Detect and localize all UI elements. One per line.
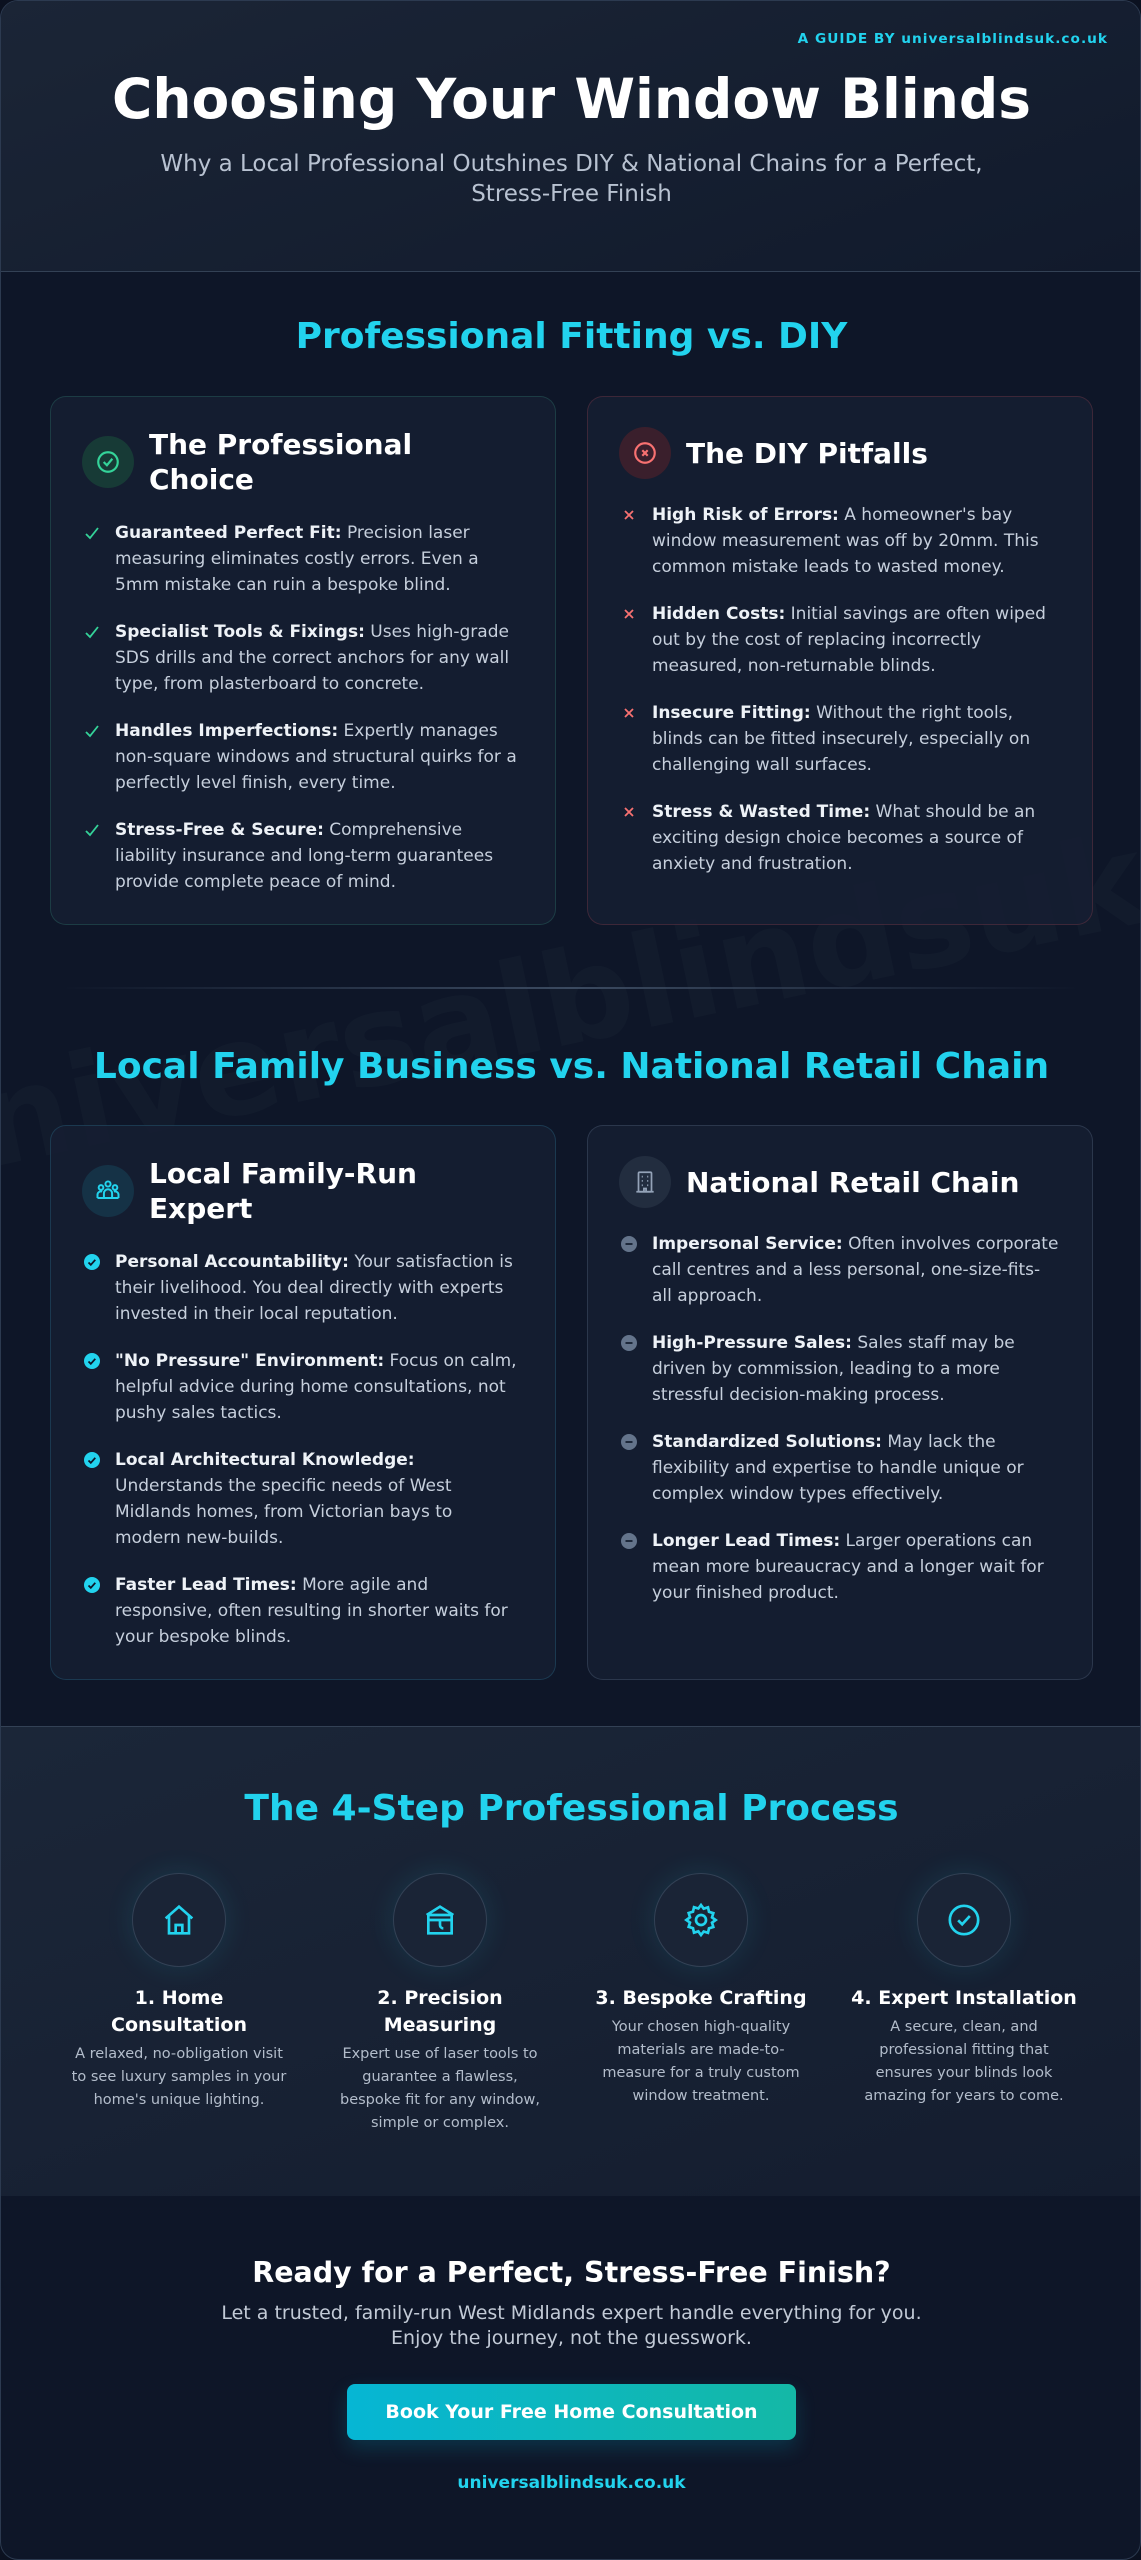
panel: national retail chain: [587, 1125, 1093, 1680]
panel: local family-run: [50, 1125, 556, 1680]
item: Stress-Free & Secure: Comprehensive liability insurance and long-term guarantees provide complete peace of mind.: [115, 820, 493, 892]
panel: process section: [1, 1726, 1141, 2196]
title: Choosing Your Window Blinds: [112, 67, 1031, 131]
item: Stress & Wasted Time: What should be an exciting design choice becomes a source of anxiety and frustration.: [652, 802, 1035, 874]
heading: DIY: The DIY Pitfalls: [686, 436, 928, 470]
item: "No Pressure" Environment: Focus on calm, helpful advice during home consultations, not pushy sales tactics.: [115, 1351, 517, 1423]
footer link: universalblindsuk.co.uk: [457, 2473, 686, 2493]
panel: DIY pitfalls: [587, 396, 1093, 925]
CTA heading: Ready for a Perfect, Stress-Free Finish?: [252, 2256, 891, 2289]
CTA text: Let a trusted, family-run West Midlands expert handle everything for you.: [221, 2302, 922, 2324]
CTA button: [347, 2384, 796, 2440]
item: Hidden Costs: Initial savings are often wiped out by the cost of replacing incorrectly measured, non-returnable blinds.: [652, 604, 1046, 676]
item: Handles Imperfections: Expertly manages non-square windows and structural quirks for a perfectly level finish, every time.: [115, 721, 517, 793]
step 2: 2. Precision Measuring: [377, 1987, 503, 2036]
item: Guaranteed Perfect Fit: Precision laser measuring eliminates costly errors. Even a 5mm mistake can ruin a bespoke blind.: [115, 523, 479, 595]
icon: gear: [654, 1873, 748, 1967]
item: call centres and a less personal, one-size-fits-: [652, 1260, 1040, 1280]
item: [621, 1234, 1058, 1306]
item: High Risk of Errors: A homeowner's bay window measurement was off by 20mm. This common mistake leads to wasted money.: [652, 505, 1039, 577]
step 1: A relaxed, no-obligation visit to see luxury samples in your home's unique lighting.: [72, 2046, 286, 2108]
icon: check circle: [917, 1873, 1011, 1967]
step 3: [595, 1872, 807, 2104]
item: modern new-builds.: [115, 1528, 283, 1548]
step 1: 1. Home Consultation: [111, 1987, 247, 2036]
step 4: A secure, clean, and professional fitting that ensures your blinds look amazing for years to come.: [864, 2019, 1064, 2104]
item: Specialist Tools & Fixings: Uses high-grade SDS drills and the correct anchors for any wall type, from plasterboard to concrete.: [115, 622, 509, 694]
heading: local: Local Family-Run Expert: [149, 1157, 417, 1225]
step 2: [340, 1872, 540, 2131]
step 3: Your chosen high-quality materials are made-to-: [612, 2019, 790, 2058]
item: Standardized Solutions: May lack the flexibility and expertise to handle unique or complex window types effectively.: [652, 1432, 1024, 1504]
item: [84, 1450, 452, 1548]
icon: house: [132, 1873, 226, 1967]
panel: professional choice: [50, 396, 556, 925]
heading: national: National Retail Chain: [686, 1166, 1019, 1198]
step 3: 3. Bespoke Crafting: [595, 1987, 807, 2009]
icon: measuring: [393, 1873, 487, 1967]
item: High-Pressure Sales: Sales staff may be driven by commission, leading to a more stressful decision-making process.: [652, 1333, 1015, 1405]
step 1: [72, 1872, 286, 2108]
guide label: A GUIDE BY universalblindsuk.co.uk: [798, 31, 1108, 47]
item: Longer Lead Times: Larger operations can mean more bureaucracy and a longer wait for your finished product.: [652, 1531, 1044, 1603]
heading: professional: The Professional Choice: [149, 428, 412, 496]
section title: local vs national: Local Family Business vs. National Retail Chain: [94, 1046, 1049, 1087]
item: Impersonal Service: Often involves corporate: [652, 1234, 1058, 1254]
CTA text: Enjoy the journey, not the guesswork.: [391, 2327, 752, 2349]
step 4: [851, 1872, 1077, 2104]
header background: [1, 1, 1141, 272]
step 2: bespoke fit for any window,: [340, 2092, 540, 2108]
step 2: guarantee a flawless,: [362, 2069, 518, 2085]
CTA button: Book Your Free Home Consultation: [385, 2401, 758, 2423]
heading: national: [619, 1156, 1019, 1208]
step 4: 4. Expert Installation: [851, 1987, 1077, 2009]
heading: DIY: [619, 427, 928, 479]
subtitle: Why a Local Professional Outshines DIY & National Chains for a Perfect, Stress-Free Finish: [160, 151, 983, 207]
step 2: simple or complex.: [371, 2115, 509, 2131]
CTA text: [221, 2302, 922, 2349]
process title: The 4-Step Professional Process: [244, 1788, 899, 1829]
item: Understands the specific needs of West: [115, 1476, 452, 1496]
step 3: measure for a truly custom window treatment.: [602, 2065, 800, 2104]
item: Personal Accountability: Your satisfaction is their livelihood. You deal directly with experts invested in their local reputation.: [115, 1252, 513, 1324]
step 2: Expert use of laser tools to: [342, 2046, 538, 2062]
section title: professional vs DIY: Professional Fitting vs. DIY: [296, 316, 847, 357]
item: Midlands homes, from Victorian bays to: [115, 1502, 452, 1522]
item: Insecure Fitting: Without the right tools, blinds can be fitted insecurely, especially on challenging wall surfaces.: [652, 703, 1030, 775]
item: all approach.: [652, 1286, 762, 1306]
item: Faster Lead Times: More agile and responsive, often resulting in shorter waits for your bespoke blinds.: [115, 1575, 508, 1647]
item: Local Architectural Knowledge:: [115, 1450, 415, 1470]
